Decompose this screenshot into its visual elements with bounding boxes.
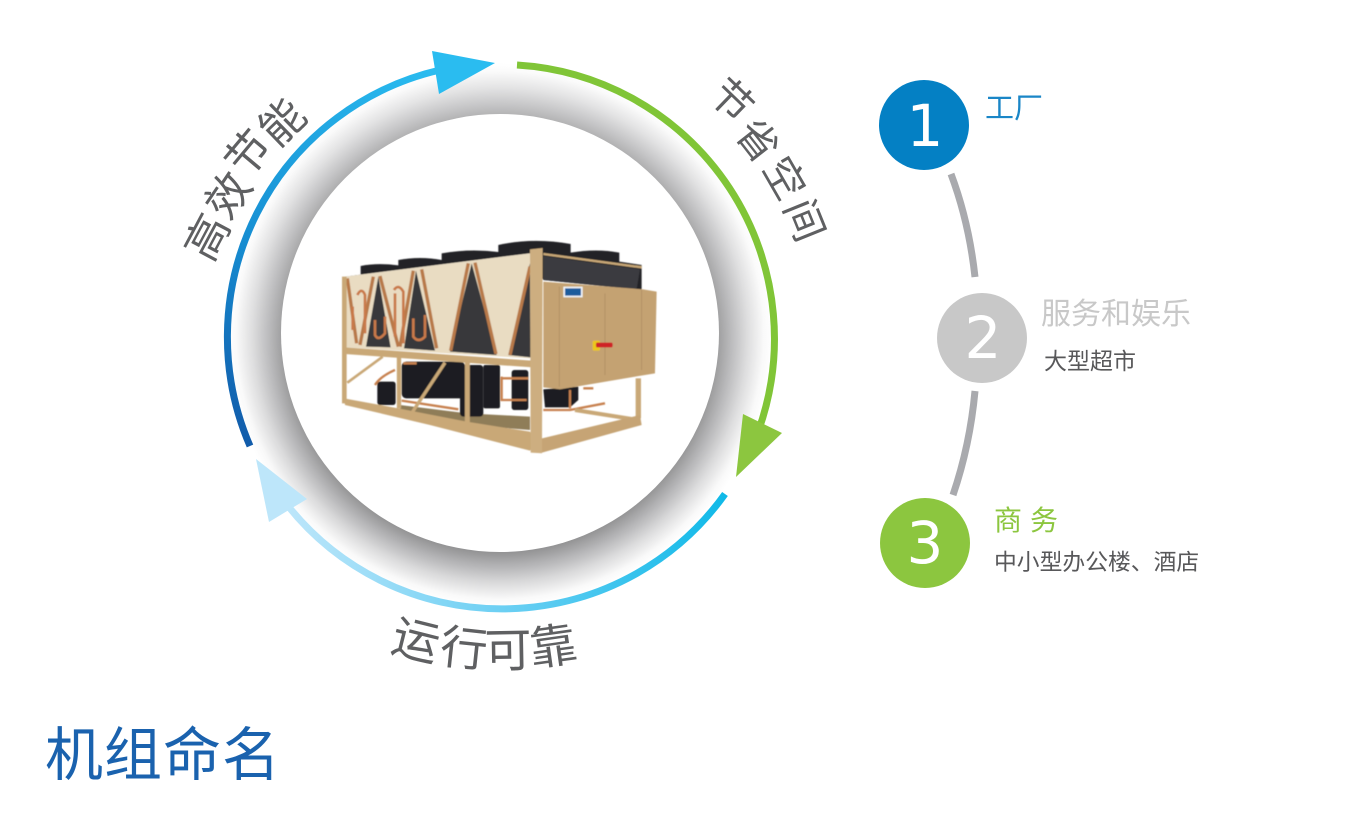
- dark coil triangles: [366, 263, 531, 357]
- step 3: business: 商务: [994, 505, 1066, 536]
- step 1: factory: 工厂: [985, 93, 1043, 125]
- label: 节省空间: 间: [775, 193, 833, 248]
- label: 高效节能: 节: [216, 121, 282, 187]
- disconnect switch: [593, 341, 600, 351]
- frame: [344, 254, 642, 425]
- label: 节省空间: 空: [754, 149, 814, 208]
- chiller unit illustration: [344, 241, 657, 453]
- label: 运行可靠: 行: [438, 620, 490, 677]
- arc arrow: green: [517, 65, 782, 477]
- condenser louver: [543, 256, 640, 289]
- logo badge: [563, 287, 583, 297]
- lower compartment machinery: [400, 405, 530, 430]
- step 1: factory: [879, 80, 1043, 170]
- label: 高效节能: 高: [176, 207, 240, 269]
- title: 机组命名: [45, 723, 281, 788]
- label: 节省空间: 省: [726, 110, 788, 171]
- step 3: business: 3: [907, 509, 943, 577]
- label: 高效节能: 效: [197, 164, 262, 228]
- control box: [543, 282, 657, 389]
- label: 运行可靠: 靠: [526, 617, 580, 676]
- shaded ring: [228, 63, 772, 607]
- coil section panels: [345, 253, 530, 358]
- step 2: services and entertainment: [937, 293, 1191, 383]
- copper hairpin tubes: [353, 287, 425, 343]
- label: 高效节能: [176, 90, 316, 269]
- label: 运行可靠: 运: [387, 609, 445, 672]
- arc arrow: light blue: [256, 459, 725, 609]
- arc arrow: blue: [227, 51, 495, 446]
- copper refrigerant pipes: [375, 363, 605, 410]
- fans: [345, 241, 642, 290]
- label: 高效节能: 能: [250, 90, 316, 156]
- label: 节省空间: 节: [701, 70, 762, 132]
- step 2: services and entertainment: 大型超市: [1044, 348, 1136, 374]
- step 3: business: [880, 498, 1199, 588]
- step 1: factory: 1: [907, 92, 943, 160]
- label: 运行可靠: [387, 609, 580, 677]
- connector curves: [951, 174, 975, 495]
- step 2: services and entertainment: 服务和娱乐: [1041, 298, 1191, 331]
- copper coil edges: [347, 263, 530, 355]
- label: 节省空间: [701, 70, 833, 248]
- step 2: services and entertainment: 2: [965, 304, 1001, 372]
- step 3: business: 中小型办公楼、酒店: [994, 549, 1199, 575]
- label: 运行可靠: 可: [484, 624, 532, 677]
